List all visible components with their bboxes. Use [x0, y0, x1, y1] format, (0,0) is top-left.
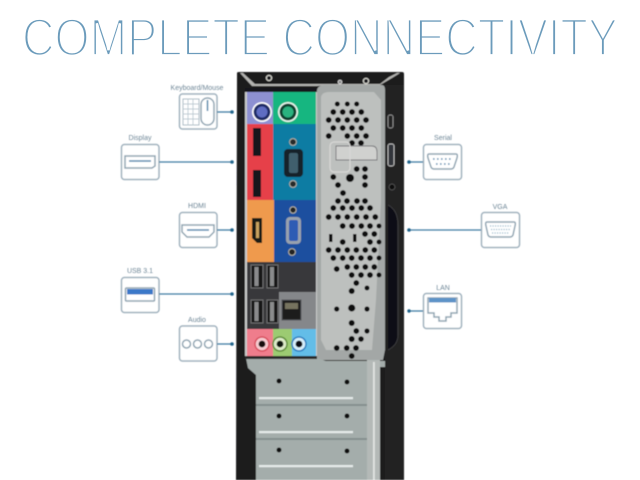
connector: HDMI: HDMI — [188, 203, 206, 210]
connector: audio: Audio — [188, 317, 206, 324]
DisplayPort ports — [253, 128, 261, 197]
connector: keyboard/mouse: Keyboard/Mouse — [171, 85, 224, 92]
connector: display: Display — [129, 135, 152, 142]
connector: USB 3.1: USB 3.1 — [127, 268, 153, 275]
PS/2 ports — [252, 102, 298, 122]
connector: audio — [180, 317, 234, 361]
tower case — [236, 72, 404, 480]
connector: USB 3.1 — [122, 268, 234, 312]
perforation holes — [326, 102, 382, 359]
metal clip — [336, 146, 377, 160]
audio jacks — [255, 337, 306, 351]
LAN port — [282, 300, 301, 320]
connector: display — [122, 135, 234, 180]
lower expansion slots — [246, 358, 385, 480]
clip outline — [330, 142, 350, 172]
HDMI port — [252, 218, 262, 243]
I/O plate — [245, 88, 317, 359]
top frame — [240, 73, 400, 86]
connector: serial: Serial — [434, 135, 452, 142]
connector: VGA: VGA — [493, 204, 508, 211]
right side black strip — [385, 85, 404, 480]
connector: serial — [407, 135, 462, 180]
top screws — [266, 75, 369, 84]
connector: VGA — [407, 204, 520, 248]
USB ports — [251, 265, 278, 323]
connector: keyboard/mouse — [171, 85, 234, 129]
metal perforated panel — [317, 85, 385, 360]
perforated panel highlights — [321, 92, 381, 350]
computer tower rear photo — [236, 72, 404, 480]
serial port — [284, 139, 303, 187]
connector: LAN: LAN — [436, 285, 450, 292]
connector: LAN — [407, 285, 462, 328]
VGA port — [286, 207, 301, 255]
connector: HDMI — [180, 203, 234, 248]
